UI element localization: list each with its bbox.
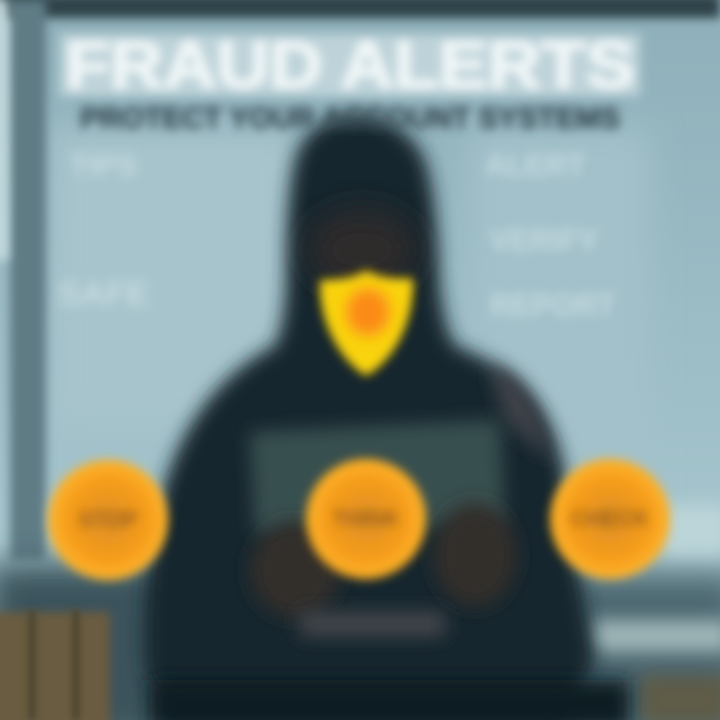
icon: yellow shield <box>320 270 413 376</box>
hooded figure <box>144 115 630 720</box>
left text blocks: TIPS <box>70 149 137 182</box>
right text blocks <box>485 149 615 322</box>
badge: left <box>48 460 168 580</box>
badge: left: STOP <box>78 507 138 532</box>
right text blocks: VERIFY <box>490 224 598 257</box>
badge: center: THINK <box>332 506 400 531</box>
badge: center <box>306 459 426 579</box>
badge: right <box>550 459 670 579</box>
laptop screen <box>250 420 517 636</box>
title: FRAUD ALERTS <box>65 27 635 103</box>
left text blocks: SAFE <box>58 275 149 313</box>
right text blocks: REPORT <box>490 289 615 322</box>
left text blocks <box>58 149 149 313</box>
right text blocks: ALERT <box>485 149 585 182</box>
badge: right: CHECK <box>571 506 649 531</box>
subtitle: PROTECT YOUR ACCOUNT SYSTEMS <box>80 102 620 135</box>
